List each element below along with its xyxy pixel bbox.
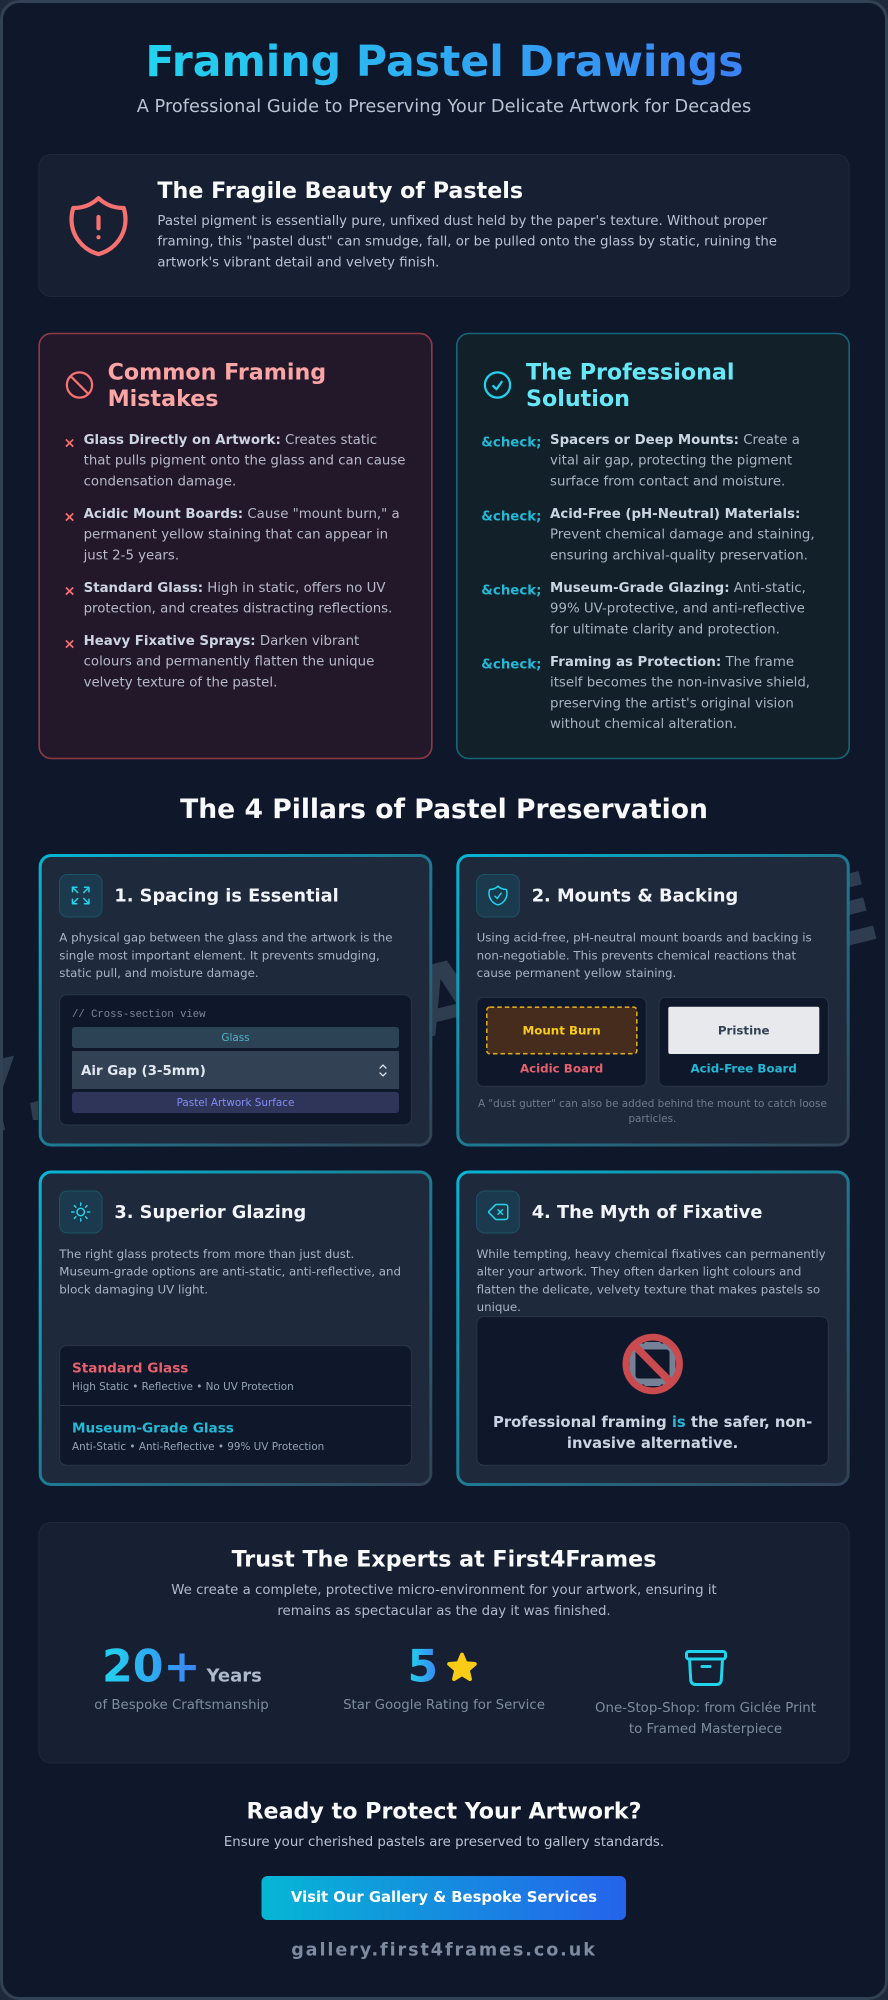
- stat: 5 star rating: 5: [408, 1642, 438, 1693]
- icon: check circle: [485, 372, 510, 398]
- text: cta subtext: Ensure your cherished pastels are preserved to gallery standards.: [224, 1835, 664, 1850]
- note: dust gutter: particles.: [628, 1113, 676, 1125]
- mistake list: velvety texture of the pastel.: [84, 675, 277, 690]
- stat: 20+ years: [94, 1642, 269, 1713]
- heading: mistakes: [108, 360, 326, 412]
- stat: one-stop-shop: [595, 1652, 816, 1737]
- diagram: acid-free board: [659, 998, 828, 1086]
- text block: fixative: flatten the delicate, velvety texture that makes pastels so: [477, 1282, 820, 1296]
- title: [137, 37, 751, 117]
- diagram: cross-section view: Glass: [221, 1032, 250, 1044]
- text block: spacing: static pull, and moisture damage.: [59, 966, 259, 980]
- mistake list: permanent yellow staining that can appear in: [84, 528, 388, 543]
- text: professional framing: [493, 1414, 812, 1452]
- button: visit gallery: [262, 1876, 626, 1920]
- solution list: Museum-Grade Glazing: Anti-static,: [550, 581, 806, 596]
- panel: pillar 2 mounts: [458, 856, 848, 1145]
- solution list: &check;: [481, 584, 541, 599]
- heading: fragile beauty: The Fragile Beauty of Pastels: [157, 178, 523, 204]
- mistake list: Heavy Fixative Sprays: Darken vibrant: [84, 634, 359, 649]
- heading: ready to protect: Ready to Protect Your Artwork?: [246, 1798, 642, 1824]
- panel: trust the experts: [39, 1522, 849, 1763]
- panel: pillar 3 glazing: [40, 1172, 431, 1484]
- heading: mistakes: Mistakes: [108, 386, 218, 412]
- panel: the fragile beauty of pastels: [39, 154, 849, 296]
- subtitle: A Professional Guide to Preserving Your Delicate Artwork for Decades: [137, 97, 751, 117]
- text block: spacing: single most important element. It prevents smudging,: [59, 948, 380, 962]
- heading: mistakes: Common Framing: [108, 360, 326, 386]
- mistake list: ×: [64, 636, 76, 652]
- mistake list: protection, and creates distracting reflections.: [84, 602, 392, 617]
- call to action: [224, 1798, 664, 1961]
- panel: common framing mistakes: [39, 334, 432, 758]
- solution list: Prevent chemical damage and staining,: [550, 528, 815, 543]
- text block: fragile beauty: Pastel pigment is essentially pure, unfixed dust held by the paper's texture. Without proper: [157, 214, 768, 229]
- heading: mounts: 2. Mounts & Backing: [532, 887, 738, 907]
- mistake list: that pulls pigment onto the glass and can cause: [84, 454, 405, 469]
- text block: glazing: Museum-grade options are anti-static, anti-reflective, and: [59, 1265, 401, 1279]
- heading: solution: Solution: [526, 386, 630, 412]
- icon: sun: [60, 1191, 102, 1233]
- button: visit gallery: Visit Our Gallery & Bespoke Services: [291, 1889, 597, 1906]
- text block: spacing: A physical gap between the glass and the artwork is the: [59, 931, 393, 945]
- text: A: [396, 936, 495, 1062]
- solution list: surface from contact and moisture.: [550, 474, 785, 489]
- text block: mounts: Using acid-free, pH-neutral mount boards and backing is: [477, 931, 812, 945]
- heading: trust: Trust The Experts at First4Frames: [232, 1547, 656, 1573]
- panel: pillar 4 fixative: [458, 1172, 848, 1484]
- text: professional framing: Professional framing is the safer, non-: [493, 1414, 812, 1431]
- mistake list: [64, 433, 405, 690]
- mistake list: ×: [64, 510, 76, 526]
- comparison: glass types: Museum-Grade Glass: [72, 1421, 234, 1437]
- diagram: acidic board: Mount Burn: [522, 1023, 601, 1037]
- mistake list: ×: [64, 584, 76, 600]
- mistake list: just 2-5 years.: [83, 548, 179, 563]
- stat: 20+ years: Years: [206, 1666, 262, 1687]
- text block: spacing: [59, 931, 393, 980]
- comparison: glass types: [60, 1346, 411, 1465]
- panel: the professional solution: [457, 334, 849, 758]
- stat: one-stop-shop: One-Stop-Shop: from Giclée Print: [595, 1700, 816, 1716]
- solution list: 99% UV-protective, and anti-reflective: [550, 602, 805, 617]
- solution list: [481, 433, 815, 732]
- text block: mounts: cause permanent yellow staining.: [477, 966, 676, 980]
- text block: fixative: unique.: [477, 1300, 521, 1314]
- title: Framing Pastel Drawings: [145, 37, 744, 87]
- mistake list: Glass Directly on Artwork: Creates static: [84, 433, 377, 448]
- diagram: acidic board: [477, 998, 646, 1086]
- text block: trust: We create a complete, protective micro-environment for your artwork, ensuring it: [171, 1583, 717, 1598]
- text block: fixative: [477, 1247, 826, 1314]
- solution list: Spacers or Deep Mounts: Create a: [550, 433, 800, 448]
- diagram: cross-section view: Air Gap (3-5mm): [81, 1064, 206, 1079]
- solution list: for ultimate clarity and protection.: [550, 622, 780, 637]
- solution list: without chemical alteration.: [550, 717, 737, 732]
- diagram: acid-free board: Acid-Free Board: [691, 1062, 797, 1076]
- icon: backspace: [477, 1191, 519, 1233]
- diagram: cross-section view: Pastel Artwork Surface: [177, 1097, 294, 1109]
- diagram: cross-section view: [60, 995, 411, 1125]
- solution list: &check;: [481, 658, 541, 673]
- icon: shield warning: [71, 198, 126, 254]
- stat: 5 star rating: [343, 1642, 545, 1713]
- mistake list: ×: [64, 436, 76, 452]
- stat: one-stop-shop: to Framed Masterpiece: [629, 1722, 782, 1737]
- solution list: &check;: [481, 510, 541, 525]
- solution list: &check;: [481, 436, 541, 451]
- text block: fragile beauty: framing, this "pastel dust" can smudge, fall, or be pulled onto the glass by static, ruining the: [157, 235, 777, 250]
- solution list: preserving the artist's original vision: [550, 696, 794, 711]
- text: professional framing: invasive alternative.: [567, 1435, 738, 1452]
- icon: ban: [67, 372, 92, 398]
- text block: fragile beauty: [157, 214, 777, 270]
- text block: mounts: [477, 931, 812, 980]
- stat: 5 star rating: Star Google Rating for Service: [343, 1698, 545, 1713]
- text block: glazing: [58, 1247, 401, 1296]
- text block: mounts: non-negotiable. This prevents chemical reactions that: [477, 948, 797, 962]
- comparison: glass types: Anti-Static • Anti-Reflective • 99% UV Protection: [72, 1441, 324, 1453]
- panel: pillar 1 spacing: [40, 856, 431, 1145]
- solution list: Acid-Free (pH-Neutral) Materials:: [550, 507, 800, 522]
- text block: fixative: While tempting, heavy chemical fixatives can permanently: [477, 1247, 826, 1261]
- icon: shield check: [477, 874, 519, 917]
- text block: trust: remains as spectacular as the day it was finished.: [277, 1604, 611, 1619]
- solution list: vital air gap, protecting the pigment: [550, 454, 792, 469]
- footer url: gallery.first4frames.co.uk: [291, 1941, 597, 1961]
- text: E: [798, 851, 888, 975]
- heading: fixative: 4. The Myth of Fixative: [532, 1203, 762, 1223]
- heading: solution: The Professional: [526, 360, 734, 386]
- heading: the 4 pillars: The 4 Pillars of Pastel Preservation: [180, 794, 708, 825]
- diagram: cross-section view: // Cross-section view: [72, 1009, 206, 1021]
- text block: fragile beauty: artwork's vibrant detail and velvety finish.: [157, 255, 439, 270]
- stat: 20+ years: of Bespoke Craftsmanship: [94, 1698, 269, 1713]
- icon: no spray: [626, 1337, 680, 1391]
- stat: 20+ years: 20+: [102, 1642, 201, 1693]
- solution list: ensuring archival-quality preservation.: [550, 548, 808, 563]
- heading: spacing: 1. Spacing is Essential: [114, 887, 339, 907]
- heading: glazing: 3. Superior Glazing: [114, 1203, 306, 1223]
- comparison: glass types: High Static • Reflective • No UV Protection: [72, 1381, 294, 1393]
- diagram: acidic board: Acidic Board: [520, 1062, 603, 1076]
- text block: trust: [171, 1583, 717, 1619]
- note: dust gutter: A "dust gutter" can also be added behind the mount to catch loose: [478, 1098, 827, 1110]
- icon: expand: [60, 874, 102, 917]
- text block: fixative: alter your artwork. They often darken light colours and: [477, 1265, 801, 1279]
- note: dust gutter: [478, 1098, 827, 1125]
- mistake list: Standard Glass: High in static, offers no UV: [84, 581, 386, 596]
- mistake list: Acidic Mount Boards: Cause "mount burn," a: [84, 507, 400, 522]
- text block: glazing: The right glass protects from more than just dust.: [58, 1247, 354, 1261]
- comparison: glass types: Standard Glass: [72, 1361, 188, 1377]
- diagram: acid-free board: Pristine: [718, 1023, 770, 1037]
- heading: solution: [526, 360, 734, 412]
- solution list: Framing as Protection: The frame: [550, 655, 794, 670]
- callout: professional framing: [477, 1317, 828, 1465]
- mistake list: colours and permanently flatten the unique: [84, 655, 374, 670]
- text block: glazing: block damaging UV light.: [59, 1282, 208, 1296]
- solution list: itself becomes the non-invasive shield,: [550, 676, 810, 691]
- mistake list: condensation damage.: [84, 474, 236, 489]
